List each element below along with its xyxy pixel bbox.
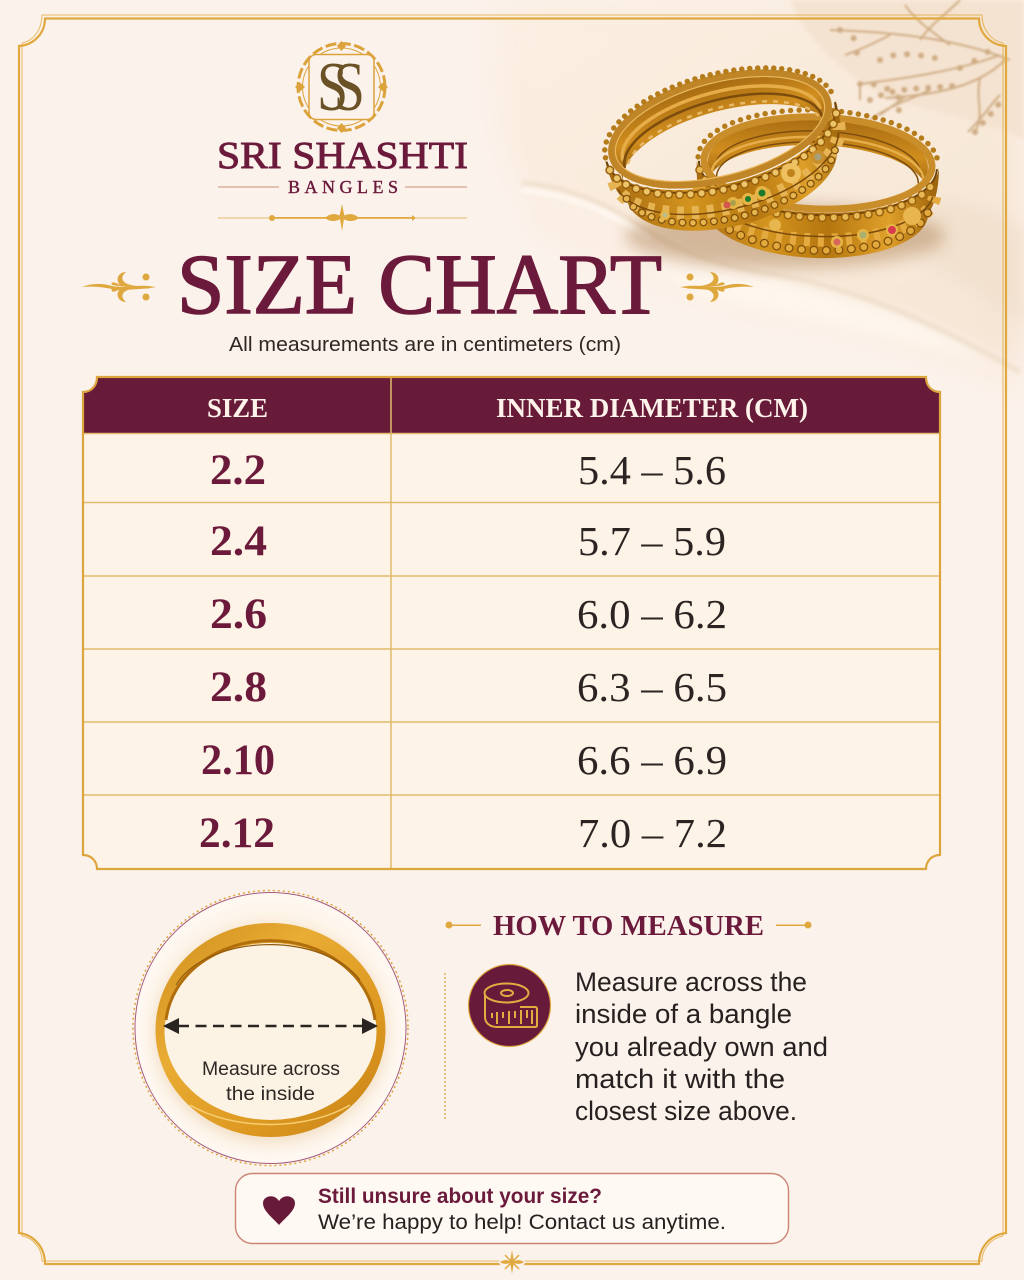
row 2.2: 5.4 – 5.6 bbox=[578, 447, 726, 493]
row 2.12 bbox=[199, 810, 727, 857]
diagram caption bbox=[202, 1059, 340, 1105]
instructions text bbox=[575, 967, 828, 1126]
logo monogram: SS bbox=[317, 48, 362, 125]
bottom frame ornament bbox=[499, 1250, 525, 1274]
row 2.10 bbox=[201, 737, 727, 784]
icon: heart bbox=[263, 1196, 295, 1225]
diagram disc bbox=[133, 890, 408, 1166]
measuring diagram bbox=[133, 890, 408, 1166]
subtitle: All measurements are in centimeters (cm) bbox=[229, 334, 621, 356]
row 2.12: 7.0 – 7.2 bbox=[578, 810, 727, 856]
icon: measuring tape bbox=[468, 964, 550, 1046]
row 2.8: 2.8 bbox=[210, 664, 267, 711]
row 2.4: 5.7 – 5.9 bbox=[578, 518, 726, 564]
instructions text: you already own and bbox=[575, 1032, 828, 1062]
plain bangle bbox=[156, 923, 386, 1141]
row 2.12: 2.12 bbox=[199, 810, 275, 857]
logo divider bbox=[218, 204, 467, 231]
table header bbox=[83, 377, 940, 433]
table body bbox=[83, 377, 940, 869]
help callout bbox=[236, 1174, 788, 1244]
callout text bbox=[318, 1185, 726, 1234]
gemstones bbox=[660, 150, 921, 248]
bangle shadow bbox=[625, 204, 945, 268]
instructions text: inside of a bangle bbox=[575, 999, 792, 1029]
size table bbox=[83, 377, 940, 869]
row 2.6 bbox=[210, 591, 727, 638]
diagram caption: the inside bbox=[226, 1084, 315, 1105]
row 2.2: 2.2 bbox=[210, 447, 266, 494]
instructions text: Measure across the bbox=[575, 967, 807, 997]
title flourish left bbox=[82, 272, 156, 302]
front bangle bbox=[591, 46, 860, 254]
row 2.2 bbox=[210, 447, 726, 494]
logo crest frame bbox=[295, 41, 388, 133]
table border bbox=[83, 377, 940, 869]
instructions text: closest size above. bbox=[575, 1096, 797, 1126]
row 2.10: 6.6 – 6.9 bbox=[577, 737, 727, 783]
diameter arrow bbox=[163, 1018, 378, 1034]
row 2.4 bbox=[210, 518, 726, 565]
brand subtitle: BANGLES bbox=[288, 177, 398, 197]
rear bangle bbox=[694, 106, 941, 262]
table header: SIZE bbox=[207, 393, 268, 423]
row 2.10: 2.10 bbox=[201, 737, 275, 784]
title flourish right bbox=[680, 272, 754, 302]
bangles photo bbox=[591, 46, 945, 268]
row 2.4: 2.4 bbox=[210, 518, 267, 565]
title: SIZE CHART bbox=[177, 236, 662, 332]
callout text: We’re happy to help! Contact us anytime. bbox=[318, 1211, 726, 1234]
row 2.6: 6.0 – 6.2 bbox=[577, 591, 727, 637]
callout text: Still unsure about your size? bbox=[318, 1185, 602, 1208]
table header: INNER DIAMETER (CM) bbox=[496, 393, 808, 423]
row 2.8: 6.3 – 6.5 bbox=[577, 664, 727, 710]
silk cloth backdrop bbox=[490, 0, 1024, 400]
instructions text: match it with the bbox=[575, 1064, 785, 1094]
dried twig decoration bbox=[830, 0, 1010, 132]
row 2.8 bbox=[210, 664, 727, 711]
dotted divider bbox=[444, 973, 446, 1121]
diagram caption: Measure across bbox=[202, 1059, 340, 1080]
row 2.6: 2.6 bbox=[210, 591, 267, 638]
logo bbox=[295, 41, 388, 133]
how to measure heading: HOW TO MEASURE bbox=[493, 910, 764, 942]
brand name: SRI SHASHTI bbox=[217, 135, 468, 177]
table grid bbox=[83, 377, 940, 869]
